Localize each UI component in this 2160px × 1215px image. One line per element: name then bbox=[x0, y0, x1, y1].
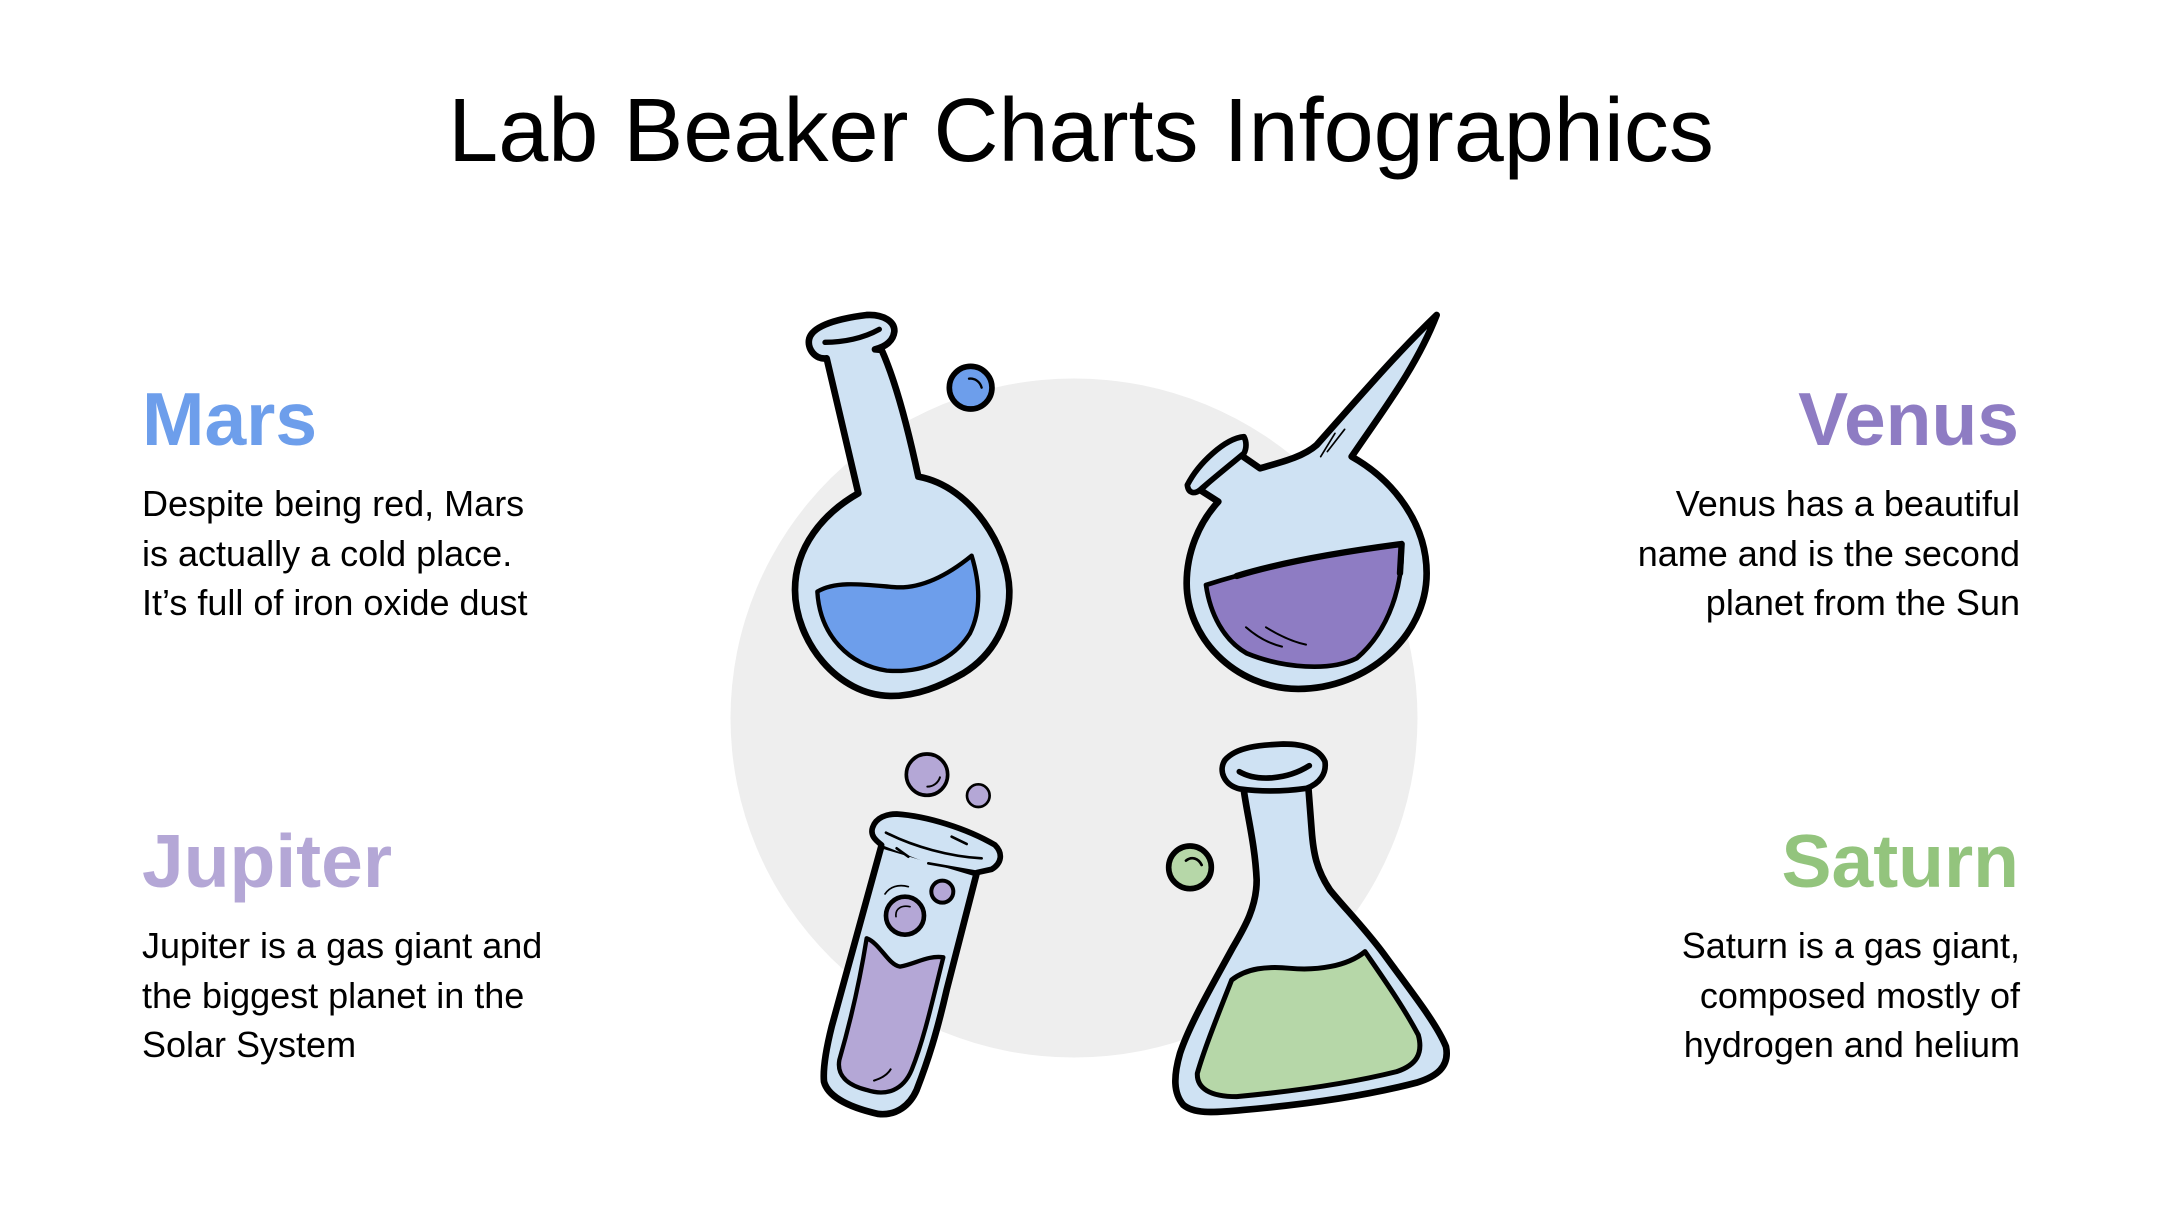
heading: Mars: Mars bbox=[142, 377, 317, 461]
text: Jupiter description: Solar System bbox=[142, 1024, 356, 1065]
title: Lab Beaker Charts Infographics bbox=[448, 81, 1714, 181]
text: Jupiter description: the biggest planet in the bbox=[142, 975, 524, 1016]
heading: Jupiter: Jupiter bbox=[142, 819, 392, 903]
text: Saturn description: hydrogen and helium bbox=[1684, 1024, 2020, 1065]
text: Venus description: name and is the second bbox=[1638, 533, 2020, 574]
text: Jupiter description: Jupiter is a gas giant and bbox=[142, 925, 542, 966]
text: Venus description: planet from the Sun bbox=[1706, 582, 2020, 623]
liquid bbox=[1197, 952, 1420, 1097]
panel: Venus bbox=[1638, 377, 2020, 623]
text: Mars description: Despite being red, Mars bbox=[142, 483, 524, 524]
tube rim fill bbox=[873, 814, 1000, 871]
flask: Venus spout flask bbox=[1187, 315, 1437, 689]
liquid bbox=[817, 556, 978, 671]
flask lip bbox=[1187, 437, 1246, 493]
flask lip highlight bbox=[825, 329, 879, 342]
heading: Venus: Venus bbox=[1798, 377, 2019, 461]
liquid bbox=[1206, 544, 1402, 667]
text: Mars description bbox=[142, 483, 528, 623]
liquid highlight bbox=[874, 1069, 891, 1081]
text: Jupiter description bbox=[142, 925, 542, 1065]
rim highlights bbox=[886, 833, 982, 872]
text: Mars description: It’s full of iron oxide dust bbox=[142, 582, 528, 623]
liquid top edge bbox=[1237, 544, 1402, 576]
liquid bbox=[839, 938, 943, 1092]
panel: Mars bbox=[142, 377, 528, 623]
text: Venus description: Venus has a beautiful bbox=[1676, 483, 2020, 524]
liquid highlights bbox=[1246, 627, 1306, 647]
text: Venus description bbox=[1638, 483, 2020, 623]
flask: Saturn conical flask bbox=[1169, 744, 1447, 1112]
heading: Saturn: Saturn bbox=[1781, 819, 2019, 903]
bubble bbox=[1169, 846, 1211, 889]
rim highlight bbox=[1239, 766, 1309, 778]
floating bubbles bbox=[906, 754, 990, 807]
flask rim bbox=[1222, 744, 1325, 791]
text: Saturn description: Saturn is a gas giant, bbox=[1682, 925, 2020, 966]
inner bubbles bbox=[885, 881, 953, 935]
background circle bbox=[730, 378, 1418, 1058]
tube rim outline bbox=[872, 814, 1000, 873]
text: Saturn description bbox=[1682, 925, 2020, 1065]
spout highlights bbox=[1321, 429, 1345, 457]
panel: Jupiter bbox=[142, 819, 542, 1065]
bubble bbox=[949, 366, 992, 409]
text: Mars description: is actually a cold place. bbox=[142, 533, 512, 574]
flask: Jupiter test tube bbox=[824, 754, 1000, 1114]
flask: Mars round-bottom flask bbox=[795, 315, 1009, 696]
panel: Saturn bbox=[1682, 819, 2020, 1065]
text: Saturn description: composed mostly of bbox=[1700, 975, 2020, 1016]
